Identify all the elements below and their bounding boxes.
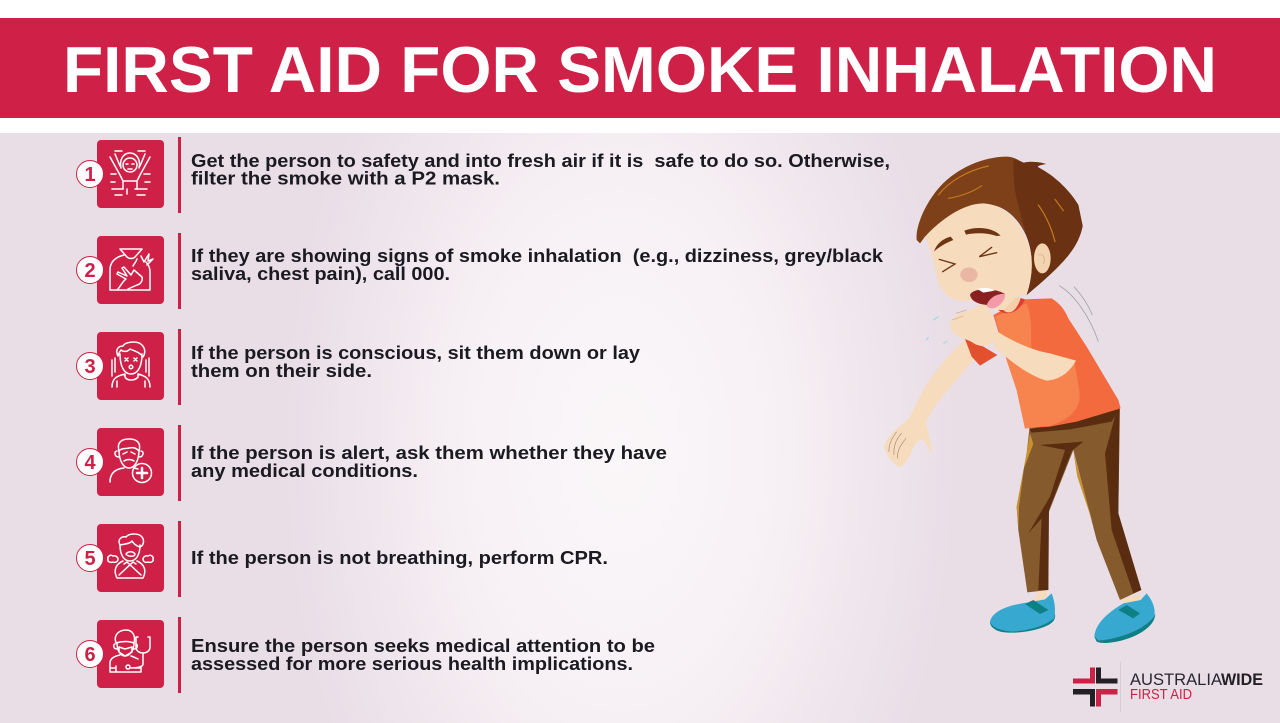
step 5 text: If the person is not breathing, perform CPR. (191, 547, 608, 568)
number badge 4: 4 (84, 452, 96, 474)
hair (917, 157, 1083, 295)
step 2 (76, 233, 884, 309)
neck (1002, 293, 1021, 312)
number badge 4 (76, 448, 104, 476)
step 6 text (191, 635, 655, 674)
number badge 2: 2 (84, 260, 96, 282)
pants (990, 407, 1155, 643)
number badge 6 (76, 640, 104, 668)
number badge 5 (76, 544, 104, 572)
icon: doctor with stethoscope (97, 620, 164, 688)
number badge 3 (76, 352, 104, 380)
forearm and fist (950, 303, 1076, 381)
icon: dizzy person (97, 332, 164, 400)
hand wrinkles (889, 432, 906, 458)
logo mark (1073, 668, 1118, 706)
number badge 2 (76, 256, 104, 284)
step 1 text: filter the smoke with a P2 mask. (191, 168, 500, 188)
icon: chest pain (97, 236, 164, 304)
step 2 text (191, 245, 884, 284)
icon: person choking (97, 524, 164, 592)
logo wordmark: AUSTRALIA (1130, 671, 1222, 689)
title: FIRST AID FOR SMOKE INHALATION (63, 33, 1217, 106)
lower arm and hand (884, 340, 977, 467)
step 4 text: any medical conditions. (191, 460, 418, 481)
ear (1034, 243, 1051, 273)
step 2 text: If they are showing signs of smoke inhalation (e.g., dizziness, grey/black (191, 245, 884, 266)
step 3 (76, 329, 641, 405)
number badge 1: 1 (84, 164, 96, 186)
step 3 text: If the person is conscious, sit them down or lay (191, 342, 641, 363)
number badge 1 (76, 160, 104, 188)
number badge 3: 3 (84, 356, 96, 378)
logo: WIDE (1221, 671, 1263, 689)
step 6 (76, 617, 655, 693)
step 5 (76, 521, 608, 597)
face (925, 203, 1033, 310)
step 3 text (191, 342, 641, 381)
step 1 (76, 137, 890, 213)
step 6 text: assessed for more serious health implications. (191, 653, 633, 674)
icon: person escaping smoke (97, 140, 164, 208)
step 4 (76, 425, 667, 501)
background glow (270, 133, 970, 723)
left shoe (990, 591, 1055, 633)
t-shirt (965, 298, 1121, 428)
icon: person with medical cross (97, 428, 164, 496)
logo subtitle: FIRST AID (1130, 687, 1192, 703)
title banner (0, 18, 1280, 118)
step 3 text: them on their side. (191, 360, 372, 381)
cough droplets (927, 317, 947, 343)
step 2 text: saliva, chest pain), call 000. (191, 263, 450, 284)
step 6 text: Ensure the person seeks medical attention to be (191, 635, 655, 656)
step 4 text: If the person is alert, ask them whether they have (191, 442, 667, 463)
step 4 text (191, 442, 667, 481)
step 1 text (191, 150, 890, 188)
step 1 text: Get the person to safety and into fresh air if it is safe to do so. Otherwise, (191, 150, 890, 171)
motion lines (1059, 286, 1098, 342)
logo (1073, 662, 1263, 712)
number badge 6: 6 (84, 644, 96, 666)
number badge 5: 5 (84, 548, 96, 570)
right shoe (1094, 593, 1155, 643)
illustration: coughing boy (884, 157, 1155, 643)
